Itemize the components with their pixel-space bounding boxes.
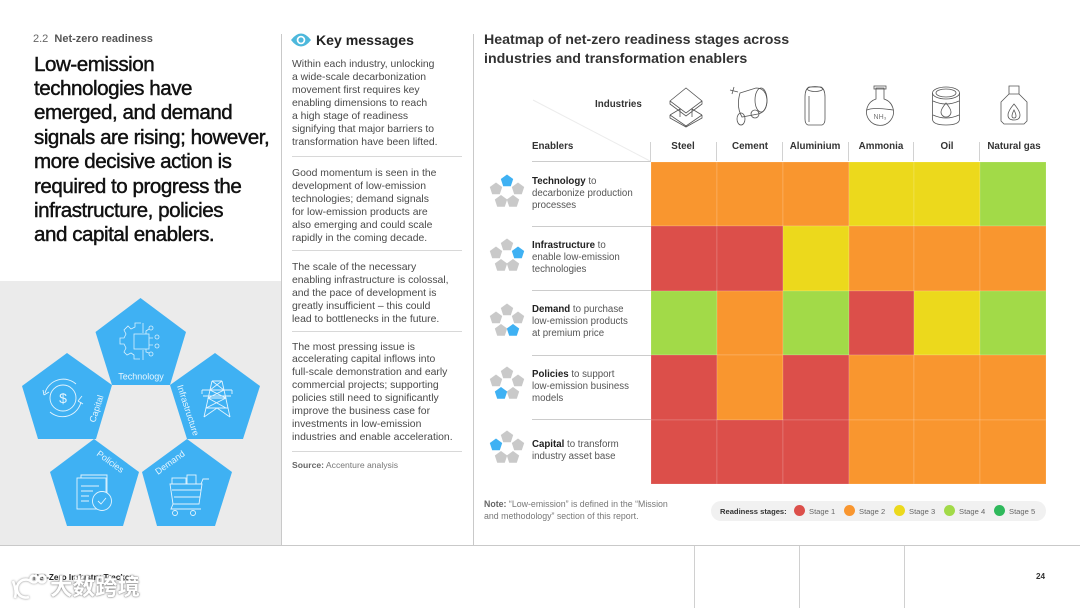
enabler: policies: models	[532, 392, 563, 404]
key message 1: a wide-scale decarbonization	[292, 72, 426, 83]
key message 1: movement first requires key	[292, 85, 420, 96]
key message 4: policies still need to significantly	[292, 393, 439, 404]
key message 2: also emerging and could scale	[292, 220, 432, 231]
icon: gas bottle	[1001, 86, 1027, 124]
icon: cement mixer	[730, 87, 767, 125]
note: and methodology” section of this report.	[484, 510, 639, 520]
key message 4: improve the business case for	[292, 406, 430, 417]
key message 1: transformation have been lifted.	[292, 137, 438, 148]
key message 2: Good momentum is seen in the	[292, 168, 436, 179]
icon: ammonia flask	[867, 86, 894, 125]
key message 1	[292, 59, 438, 148]
axis label: enablers: Enablers	[532, 141, 573, 152]
legend: Stage 2	[859, 506, 885, 516]
key message 4: accelerating capital inflows into	[292, 354, 435, 365]
legend	[711, 501, 1046, 521]
icon: steel beam	[670, 88, 702, 127]
axis label: industries: Industries	[595, 98, 642, 110]
pentagon: demand: Demand	[153, 449, 187, 477]
enabler: policies	[532, 368, 629, 404]
pentagon diagram	[22, 298, 260, 526]
pentagon: demand	[142, 439, 232, 526]
enabler: infrastructure: Infrastructure to	[532, 240, 606, 250]
main title: technologies have	[34, 77, 192, 100]
footer text: Net-Zero Industry Tracker	[33, 572, 133, 582]
key message 1: enabling dimensions to reach	[292, 98, 427, 109]
enabler: capital: Capital to transform	[532, 438, 619, 450]
enabler: technology: decarbonize production	[532, 188, 633, 198]
key message 2: rapidly in the coming decade.	[292, 233, 427, 244]
enabler: technology	[532, 176, 633, 210]
mini pentagons: capital	[490, 430, 524, 463]
key message 4: commercial projects; supporting	[292, 380, 439, 391]
icon: eye	[291, 34, 311, 46]
pentagon: capital	[22, 353, 112, 439]
icon: oil barrel	[932, 87, 960, 125]
watermark	[10, 573, 140, 600]
source: Source: Accenture analysis	[292, 460, 398, 470]
key message 3: enabling infrastructure is colossal,	[292, 275, 449, 286]
note: Note: “Low-emission” is defined in the “Mission	[484, 499, 668, 509]
key message 4: The most pressing issue is	[292, 342, 415, 352]
legend: Stage 3	[909, 506, 935, 516]
heatmap title	[484, 32, 789, 66]
note	[484, 499, 668, 521]
main title: signals are rising; however,	[34, 126, 269, 149]
text: Oil	[940, 141, 954, 152]
key message 2: for low-emission products are	[292, 207, 428, 218]
key message 1: signifying that major barriers to	[292, 124, 434, 135]
pentagon: infrastructure	[170, 353, 260, 439]
key message 3: lead to bottlenecks in the future.	[292, 314, 439, 325]
key message 3: and the pace of development is	[292, 288, 436, 299]
key message 2: development of low-emission	[292, 181, 426, 192]
main title: required to progress the	[34, 175, 241, 198]
heatmap title: industries and transformation enablers	[484, 50, 747, 66]
pentagon: capital: $	[59, 390, 67, 406]
key message 3: greatly insufficient – this could	[292, 301, 430, 312]
enabler: demand: at premium price	[532, 328, 604, 338]
main title: more decisive action is	[34, 150, 232, 173]
legend: Stage 4	[959, 506, 985, 516]
key message 1: Within each industry, unlocking	[292, 59, 434, 70]
section label: 2.2 Net-zero readiness	[33, 32, 153, 44]
legend: Stage 5	[1009, 506, 1035, 516]
key message 2	[292, 168, 436, 244]
table header corner: NH₃	[874, 114, 887, 121]
enabler: demand	[532, 304, 628, 338]
enabler: demand: Demand to purchase	[532, 304, 624, 314]
text: Ammonia	[859, 141, 903, 152]
key message 4: full-scale demonstration and early	[292, 367, 447, 378]
key message 3: The scale of the necessary	[292, 262, 416, 273]
column divider	[281, 34, 282, 546]
heatmap title: Heatmap of net-zero readiness stages across	[484, 32, 789, 48]
enabler: policies: low-emission business	[532, 380, 629, 392]
enabler: demand: low-emission products	[532, 316, 628, 326]
pentagon: capital: Capital	[87, 394, 106, 424]
main title: Low-emission	[34, 52, 154, 76]
text: Cement	[732, 141, 768, 152]
main title: emerged, and demand	[34, 101, 232, 124]
grey panel background	[0, 281, 281, 546]
mini pentagons: infrastructure	[490, 238, 524, 271]
pentagon: policies	[50, 439, 139, 526]
legend: Stage 1	[809, 506, 835, 516]
enabler: infrastructure: technologies	[532, 264, 586, 274]
enabler: policies: Policies to support	[532, 368, 614, 380]
main title	[34, 52, 269, 246]
main title: and capital enablers.	[34, 223, 214, 246]
key message 1: a high stage of readiness	[292, 111, 408, 122]
key message 4	[292, 342, 453, 443]
enabler: infrastructure: enable low-emission	[532, 252, 620, 262]
pentagon: technology: Technology	[118, 372, 164, 382]
mini pentagons: technology	[490, 174, 524, 207]
mini pentagons: demand	[490, 304, 524, 336]
pentagon: policies: Policies	[95, 449, 126, 475]
key message 4: industries and enable acceleration.	[292, 432, 453, 443]
page number: 24	[1036, 572, 1045, 580]
heatmap grid	[651, 162, 1046, 484]
pentagon: infrastructure: Infrastructure	[175, 384, 201, 437]
icon: can	[805, 86, 825, 125]
text: Natural gas	[987, 141, 1041, 152]
enabler: capital	[532, 438, 619, 462]
key messages heading: Key messages	[316, 32, 414, 48]
mini pentagons: policies	[490, 366, 524, 399]
legend: Readiness stages:	[720, 506, 787, 516]
enabler: technology: processes	[532, 200, 576, 210]
watermark: 大数跨境	[50, 575, 140, 600]
enabler: infrastructure	[532, 240, 620, 274]
footer rule	[0, 545, 1080, 546]
enabler: technology: Technology to	[532, 176, 596, 186]
column headers: Steel	[671, 141, 695, 152]
text: Aluminium	[790, 141, 840, 152]
main title: infrastructure, policies	[34, 199, 223, 222]
key message 2: technologies; demand signals	[292, 194, 429, 205]
column divider	[473, 34, 474, 546]
key message 3	[292, 262, 449, 325]
pentagon: technology	[96, 298, 186, 385]
key message 4: investments in low-emission	[292, 419, 421, 430]
enabler: capital: industry asset base	[532, 450, 615, 462]
